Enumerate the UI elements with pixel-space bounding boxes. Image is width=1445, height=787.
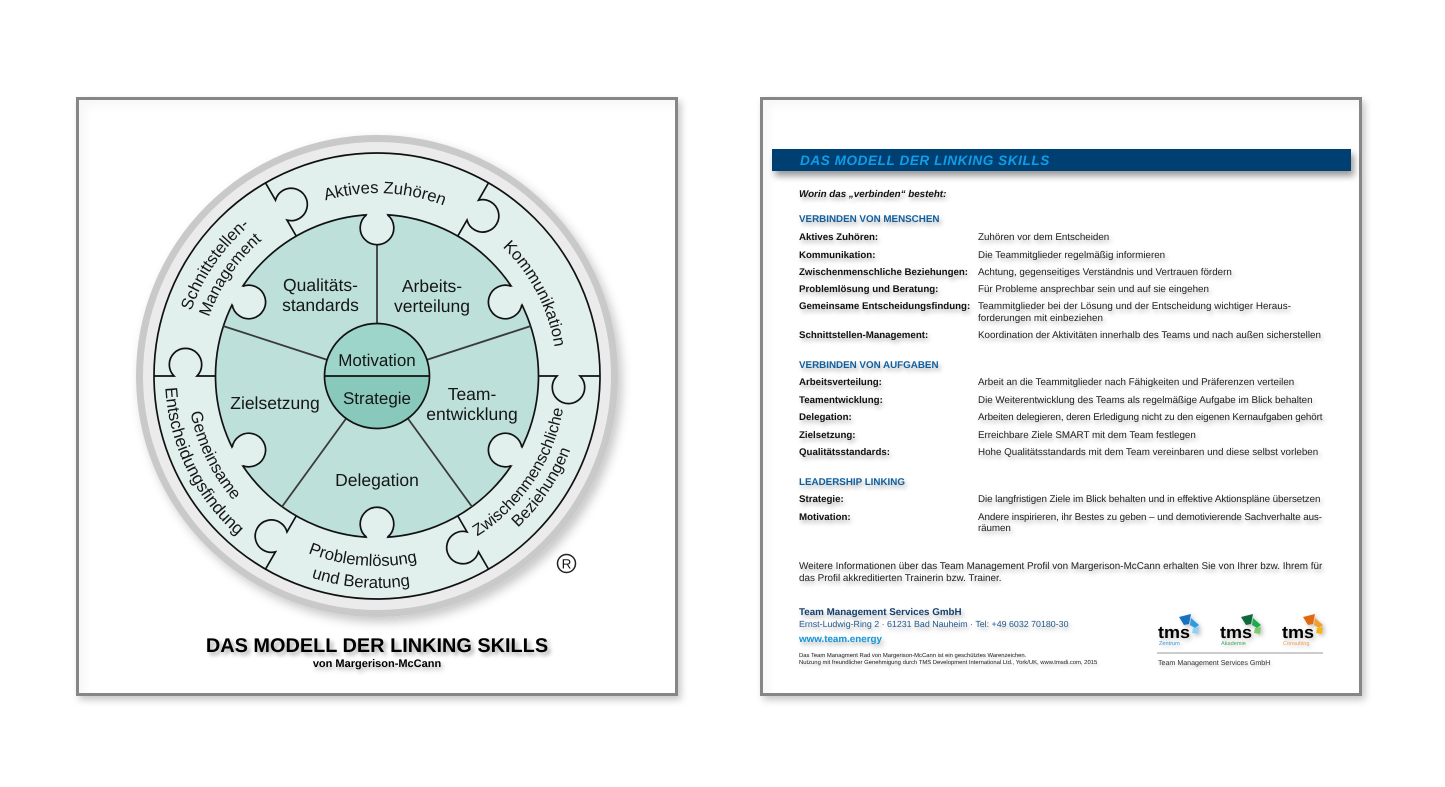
- logo: tms Consulting: Consulting: [1283, 640, 1309, 647]
- further information text: Weitere Informationen über das Team Management Profil von Margerison-McCann erhalten Sie von Ihrer bzw. Ihrem für: [799, 561, 1322, 572]
- logo: tms Consulting: tms: [1282, 623, 1314, 642]
- inner wheel with spokes: [216, 211, 538, 541]
- inner segment labels: [230, 275, 518, 490]
- row: Schnittstellen-Management: Koordination der Aktivitäten innerhalb des Teams und nach außen sicherstellen: [978, 330, 1321, 341]
- label: Qualitätsstandards: standards: [282, 295, 359, 315]
- section heading: Verbinden von Menschen: VERBINDEN VON MENSCHEN: [799, 214, 939, 225]
- row: Motivation: [799, 512, 1322, 536]
- row: Delegation: [799, 412, 1326, 426]
- label: Kommunikation: Kommunikation: [504, 240, 563, 346]
- row: Teamentwicklung: [799, 394, 1315, 410]
- label: Zwischenmenschliche Beziehungen: Beziehungen: [511, 448, 570, 527]
- center hub: [324, 324, 430, 429]
- label: Qualitätsstandards: Qualitäts-: [283, 275, 358, 295]
- label: Motivation: Motivation: [338, 351, 416, 370]
- row: Delegation: Delegation:: [799, 412, 852, 423]
- label: Teamentwicklung: Team-: [448, 384, 496, 404]
- address: Ernst-Ludwig-Ring 2 · 61231 Bad Nauheim · Tel: +49 6032 70180-30: [799, 619, 1068, 629]
- row: Arbeitsverteilung: [799, 377, 1297, 392]
- row: Problemlösung und Beratung: Für Probleme ansprechbar sein und auf sie eingehen: [978, 284, 1209, 295]
- section heading: Verbinden von Aufgaben: VERBINDEN VON AUFGABEN: [799, 360, 939, 371]
- row: Gemeinsame Entscheidungsfindung: Teammitglieder bei der Lösung und der Entscheidung wichtiger Heraus-: [978, 301, 1291, 312]
- row: Schnittstellen-Management: [799, 330, 1324, 344]
- label: Zwischenmenschliche Beziehungen: Zwischenmenschliche: [472, 408, 563, 536]
- logo: tms Zentrum: [1158, 614, 1199, 647]
- outer grey ring: [136, 135, 618, 617]
- icon: registered mark: R: [562, 556, 572, 571]
- row: Problemlösung und Beratung: Problemlösung und Beratung:: [799, 284, 938, 295]
- row: Strategie: [799, 494, 1323, 508]
- wheel subtitle: von Margerison-McCann: [313, 658, 441, 670]
- outer puzzle ring: [154, 153, 600, 599]
- label: Zielsetzung: Zielsetzung: [230, 393, 320, 413]
- row: Zwischenmenschliche Beziehungen: [799, 267, 1234, 282]
- row: Teamentwicklung: Die Weiterentwicklung des Teams als regelmäßige Aufgabe im Blick behalten: [978, 394, 1313, 406]
- label: Problemlösung und Beratung: [309, 542, 416, 590]
- row: Kommunikation: Die Teammitglieder regelmäßig informieren: [978, 250, 1165, 260]
- row: Qualitätsstandards: Qualitätsstandards:: [799, 447, 890, 458]
- row: Qualitätsstandards: [799, 447, 1321, 461]
- row: Qualitätsstandards: Hohe Qualitätsstandards mit dem Team vereinbaren und diese selbst vorleben: [978, 447, 1318, 458]
- label: Arbeitsverteilung: Arbeits-: [402, 276, 462, 296]
- label: Gemeinsame Entscheidungsfindung: Entscheidungsfindung: [165, 388, 243, 536]
- legal note: [799, 652, 1098, 668]
- row: Gemeinsame Entscheidungsfindung: Gemeinsame Entscheidungsfindung:: [799, 301, 970, 312]
- label: Delegation: Delegation: [335, 470, 419, 490]
- row: Arbeitsverteilung: Arbeitsverteilung:: [799, 377, 882, 388]
- further information text: das Profil akkreditierten Trainerin bzw. Trainer.: [799, 573, 1002, 584]
- row: Aktives Zuhören: [799, 232, 1112, 245]
- icon: registered mark: [558, 554, 576, 572]
- row: Motivation: Andere inspirieren, ihr Bestes zu geben – und demotivierende Sachverhalte aus-: [978, 512, 1322, 522]
- outer ring labels: [153, 152, 601, 616]
- website: www.team.energy: [799, 634, 882, 645]
- label: Schnittstellen-Management: Schnittstellen-: [182, 222, 247, 310]
- legal note: Das Team Managment Rad von Margerison-McCann ist ein geschütztes Warenzeichen.: [799, 652, 1026, 658]
- logo: tms Zentrum: Zentrum: [1159, 641, 1180, 647]
- row: Zwischenmenschliche Beziehungen: Achtung, gegenseitiges Verständnis und Vertrauen fördern: [978, 267, 1232, 278]
- row: Zielsetzung: Zielsetzung:: [799, 430, 856, 441]
- row: Strategie: Die langfristigen Ziele im Blick behalten und in effektive Aktionspläne übersetzen: [978, 494, 1320, 505]
- logos: [1157, 614, 1327, 654]
- row: Zwischenmenschliche Beziehungen: Zwischenmenschliche Beziehungen:: [799, 267, 968, 278]
- label: Gemeinsame Entscheidungsfindung: Gemeinsame: [192, 412, 238, 499]
- label: Strategie: Strategie: [343, 389, 411, 408]
- section heading: Leadership Linking: LEADERSHIP LINKING: [799, 477, 905, 488]
- row: Aktives Zuhören: Zuhören vor dem Entscheiden: [978, 232, 1109, 243]
- row: Gemeinsame Entscheidungsfindung: forderungen mit einbeziehen: [978, 312, 1103, 324]
- wheel diagram: [135, 135, 627, 627]
- label: Problemlösung und Beratung: Problemlösung: [309, 542, 416, 566]
- row: Motivation: Motivation:: [799, 512, 851, 522]
- panel: wheel frame: [76, 97, 678, 696]
- row: Zielsetzung: Erreichbare Ziele SMART mit dem Team festlegen: [978, 430, 1196, 441]
- label: Problemlösung und Beratung: und Beratung: [313, 570, 410, 590]
- row: Problemlösung und Beratung: [799, 284, 1212, 298]
- row: Teamentwicklung: Teamentwicklung:: [799, 394, 883, 406]
- logo: tms Akademie: Akademie: [1221, 640, 1246, 647]
- row: Zielsetzung: [799, 430, 1198, 444]
- label: Schnittstellen-Management: Management: [199, 234, 262, 316]
- intro line: Worin das „verbinden“ besteht:: [799, 189, 946, 200]
- logo: tms Consulting: [1282, 614, 1323, 647]
- row: Kommunikation: Kommunikation:: [799, 250, 875, 260]
- further information text: [799, 561, 1324, 586]
- label: Arbeitsverteilung: verteilung: [394, 296, 470, 316]
- company name: Team Management Services GmbH: [799, 607, 962, 618]
- row: Strategie: Strategie:: [799, 494, 844, 505]
- label: Teamentwicklung: entwicklung: [426, 404, 518, 424]
- row: Schnittstellen-Management: Schnittstellen-Management:: [799, 330, 928, 341]
- row: Aktives Zuhören: Aktives Zuhören:: [799, 232, 878, 243]
- label: Aktives Zuhören: Aktives Zuhören: [325, 182, 445, 206]
- header bar title: DAS MODELL DER LINKING SKILLS: [800, 153, 1050, 168]
- row: Arbeitsverteilung: Arbeit an die Teammitglieder nach Fähigkeiten und Präferenzen verteilen: [978, 377, 1294, 388]
- row: Gemeinsame Entscheidungsfindung: [799, 301, 1292, 327]
- row: Delegation: Arbeiten delegieren, deren Erledigung nicht zu den eigenen Kernaufgaben gehört: [978, 412, 1322, 423]
- row: Kommunikation: [799, 250, 1168, 264]
- logo: tms Zentrum: tms: [1158, 623, 1190, 642]
- logo: tms Akademie: tms: [1220, 623, 1252, 642]
- header bar: [772, 149, 1351, 171]
- row: Motivation: räumen: [978, 523, 1011, 534]
- panel: text frame: [760, 97, 1362, 696]
- logo: tms Akademie: [1220, 614, 1261, 647]
- wheel title: DAS MODELL DER LINKING SKILLS: [206, 635, 548, 657]
- logo caption: Team Management Services GmbH: [1158, 659, 1270, 667]
- legal note: Nutzung mit freundlicher Genehmigung durch TMS Development International Ltd., York/UK, www.tmsdi.com, 2015: [799, 660, 1097, 666]
